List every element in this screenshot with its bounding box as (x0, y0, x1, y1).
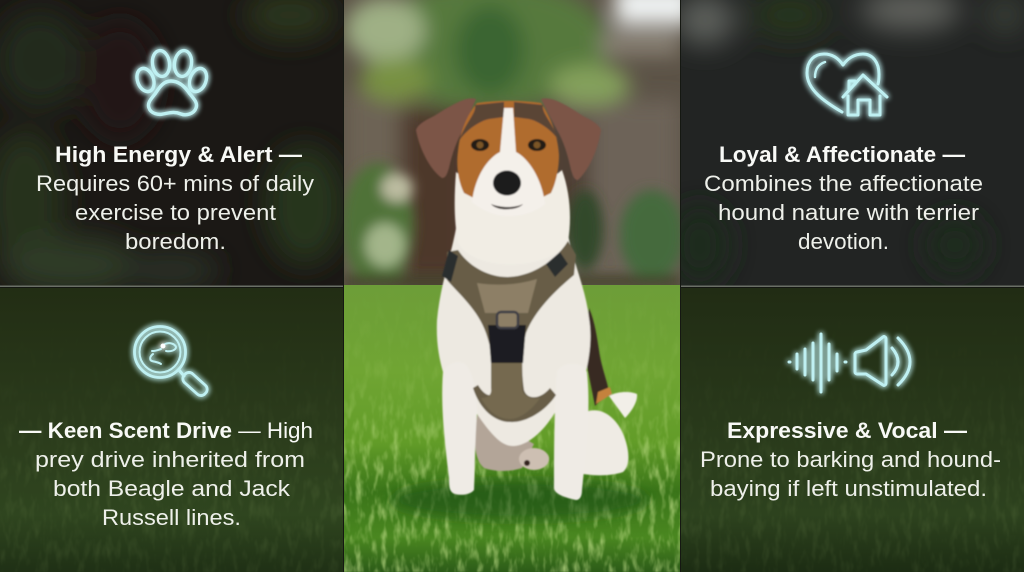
text: high energy body: exercise to prevent (75, 200, 277, 225)
dog tail and back (583, 308, 637, 418)
text: keen scent body: Russell lines. (102, 505, 241, 530)
text: high energy body: boredom. (125, 229, 226, 254)
text: keen scent body: both Beagle and Jack (53, 476, 291, 501)
panel: high energy and alert (0, 0, 345, 295)
icon: magnifying glass (134, 326, 209, 398)
text: keen scent body: prey drive inherited from (35, 447, 305, 472)
dog legs (442, 362, 588, 500)
dog haunches (475, 410, 628, 475)
panel: loyal and affectionate (670, 0, 1024, 286)
heading: high energy: High Energy & Alert — (55, 142, 303, 167)
text: expressive body (700, 447, 1001, 501)
text: high energy body (36, 171, 315, 254)
panel: keen scent drive (0, 284, 343, 572)
icon: heart and house (807, 54, 887, 115)
harness (442, 241, 576, 422)
photo background (342, 0, 695, 290)
panel: center dog photo (342, 0, 695, 572)
text: expressive body: baying if left unstimulated. (710, 476, 987, 501)
dog neck (454, 170, 571, 238)
text: loyal body: hound nature with terrier (718, 200, 980, 225)
photo lawn (344, 284, 680, 572)
panel: expressive and vocal (681, 284, 1024, 572)
dog (416, 98, 637, 500)
heading: loyal: Loyal & Affectionate — (719, 142, 965, 167)
dog body (437, 228, 590, 446)
dog head (416, 98, 601, 216)
text: high energy body: Requires 60+ mins of daily (36, 171, 315, 196)
text: loyal body: Combines the affectionate (704, 171, 983, 196)
icon: sound wave and speaker (789, 334, 910, 392)
heading: keen scent: — Keen Scent Drive — High (19, 418, 313, 443)
text: loyal body: devotion. (798, 229, 889, 254)
icon: paw (134, 49, 210, 115)
heading: expressive: Expressive & Vocal — (727, 418, 968, 443)
text: expressive body: Prone to barking and hound- (700, 447, 1001, 472)
text: loyal body (704, 171, 983, 254)
text: keen scent body (35, 447, 305, 530)
